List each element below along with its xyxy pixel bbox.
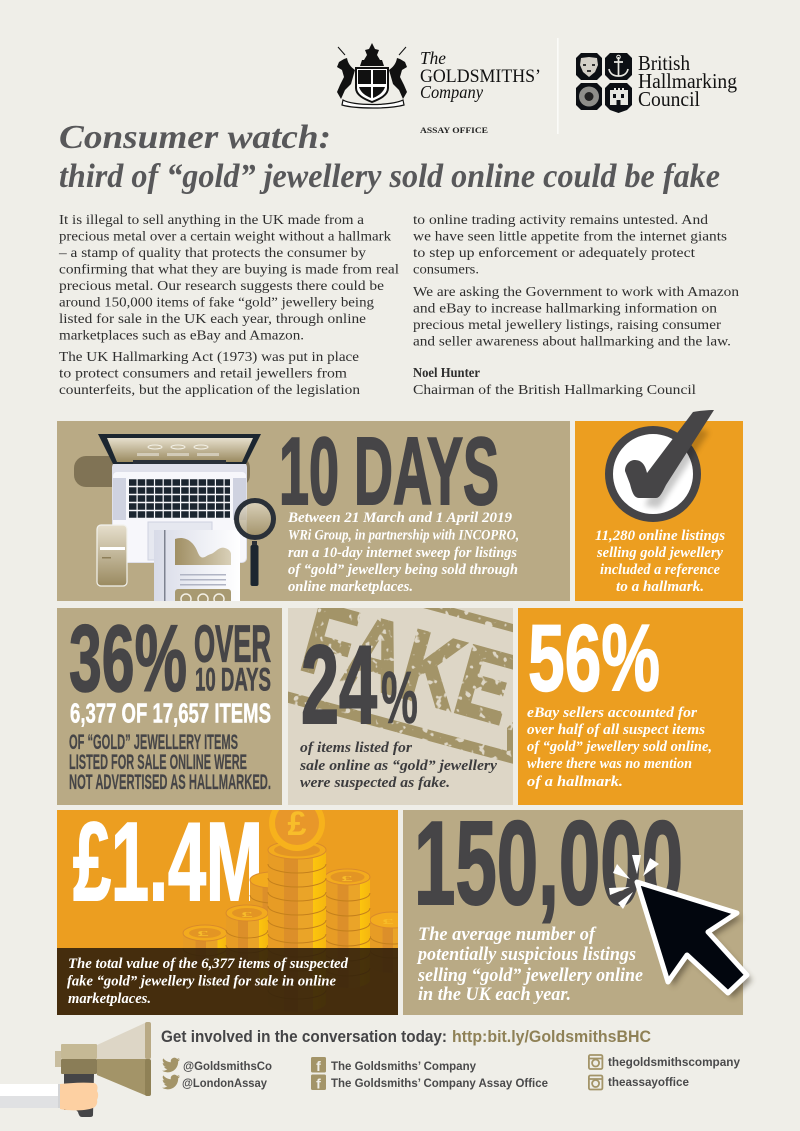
text: sweep description [287,510,519,595]
big number: 56%: 56% [528,606,660,712]
wordmark: Goldsmiths': GOLDSMITHS’ [420,66,541,87]
icon: laptop and documents illustration [74,434,274,609]
text block: intro left column: It is illegal to sell anything in the UK made from a [59,212,364,227]
panel: £1.4M [57,810,398,1015]
social: twitter [162,1058,272,1090]
text block: intro left column: precious metal. Our research suggests there could be [59,278,384,293]
icon: fake stamp [288,608,513,764]
icon: leopard tile [576,53,602,80]
icon: coat of arms crest [337,43,407,108]
text: total value: The total value of the 6,377 items of suspected [68,956,349,972]
text: listing description [595,528,725,595]
social: twitter: @LondonAssay [182,1076,267,1090]
title [59,119,720,195]
icon: castle tile [605,83,632,113]
text: ebay sellers: where there was no mention [527,756,692,772]
icon: gold coin stacks: £ [341,875,353,883]
wordmark: Assay Office: ASSAY OFFICE [420,126,488,135]
icon: fake stamp: FAKE [291,581,525,746]
text: average listings: potentially suspicious listings [416,945,636,965]
text: ebay sellers: of “gold” jewellery sold online, [527,739,712,755]
panel: 11,280 listings [575,410,743,601]
text: ebay sellers: of a hallmark. [527,774,623,790]
logo: The Goldsmiths' Company [337,43,541,135]
text: ebay sellers: eBay sellers accounted for [527,705,697,721]
text block: intro left column: listed for sale in the UK each year, through online [59,311,366,326]
wordmark: Company: Company [420,82,483,102]
big number: 36%: 36% [69,606,187,712]
text: sweep description: online marketplaces. [288,579,413,595]
text block: intro left column: counterfeits, but the application of the legislation [59,382,360,397]
text: ebay sellers: over half of all suspect items [527,722,705,738]
social: instagram [589,1055,740,1090]
text: call to action: Get involved in the conversation today: [161,1028,447,1046]
social: instagram: theassayoffice [608,1075,689,1089]
wordmark: Council: Council [638,87,700,111]
icon: gold coin stacks: £ [197,930,209,938]
icon: gold coin stacks [182,810,398,948]
text: average listings: in the UK each year. [418,985,571,1005]
big number: £1.4M: £1.4M [73,800,263,924]
text block: intro left column: marketplaces such as eBay and Amazon. [59,328,304,342]
text: total value: fake “gold” jewellery listed for sale in online [67,974,337,990]
big number: 24%: 24 [301,623,377,747]
panel: 24% fake [288,608,513,805]
wordmark: Hallmarking: Hallmarking [638,69,737,93]
text: sweep description: WRi Group, in partnership with INCOPRO, [288,528,519,544]
wordmark: The: The [420,48,446,68]
text: sweep description: Between 21 March and 1 April 2019 [287,510,512,526]
text: ebay sellers [527,705,712,790]
caption band [57,948,398,1015]
text block: intro left column: precious metal over a certain weight without a hallmark [59,228,391,244]
big number: 24%: % [381,656,418,739]
icon: rose tile [576,83,602,110]
text block: intro left column: The UK Hallmarking Act (1973) was put in place [59,349,359,365]
social: facebook: f [316,1058,321,1074]
social: instagram: thegoldsmithscompany [608,1055,740,1069]
social: facebook [311,1057,548,1092]
text block: intro right column: Chairman of the British Hallmarking Council [413,382,696,397]
text block: intro right column: We are asking the Government to work with Amazon [413,284,739,299]
icon: mouse cursor with click rays [609,855,752,998]
text: listing description: included a reference [600,562,721,578]
text: not advertised as hallmarked: LISTED FOR SALE ONLINE WERE [69,751,247,774]
text: listing description: to a hallmark. [616,579,704,595]
text block: intro right column: and seller awareness about hallmarking and the law. [413,334,731,348]
panel: 150,000 [403,797,752,1015]
text: listing description: selling gold jewellery [596,545,724,561]
text: sweep description: ran a 10-day internet sweep for listings [288,545,517,561]
panel: 10 days [57,418,570,609]
text block: intro right column: consumers. [413,262,479,276]
social: facebook: The Goldsmiths’ Company Assay Office [331,1076,548,1090]
text: total value [67,956,349,1007]
icon: gold coin stacks: £ [382,918,394,926]
text block: intro right column: precious metal jewellery listings, raising consumer [413,317,722,332]
text: suspected as fake: were suspected as fake. [300,775,450,791]
icon: gold coin stacks: £ [288,805,307,843]
label: over: OVER [194,616,271,674]
text: not advertised as hallmarked: OF “GOLD” JEWELLERY ITEMS [69,731,238,754]
social: facebook: f [316,1076,321,1092]
text block: intro right column: and eBay to increase hallmarking information on [413,300,717,316]
text block: intro right column: Noel Hunter [413,365,480,380]
icon: anchor tile [605,53,632,80]
icon: megaphone and hand [0,1022,151,1117]
text: average listings: selling “gold” jewellery online [417,966,643,986]
text block: intro left column: confirming that what they are buying is made from real [59,262,399,276]
text block: intro left column: around 150,000 items of fake “gold” jewellery being [59,294,374,310]
text: call to action [161,1028,651,1046]
title: Consumer watch: [59,119,331,156]
panel: 36% over 10 days [57,606,282,805]
wordmark: British: British [638,51,690,75]
logo: British Hallmarking Council [576,51,737,113]
text block: intro right column: to online trading activity remains untested. And [413,212,708,227]
text: total value: marketplaces. [68,991,151,1007]
social: facebook: The Goldsmiths’ Company [331,1059,476,1073]
text block: intro right column: to step up enforcement or adequately protect [413,245,695,260]
text: not advertised as hallmarked: NOT ADVERTISED AS HALLMARKED. [69,771,271,794]
text block: intro left column: to protect consumers and retail jewellers from [59,366,347,380]
icon: gold coin stacks: £ [241,911,253,919]
text: listing description: 11,280 online listings [595,528,725,544]
text block: intro left column: – a stamp of quality that protects the consumer by [58,245,366,260]
logo divider [557,38,559,134]
text: suspected as fake: sale online as “gold” jewellery [299,758,497,774]
panel: 56% ebay [518,606,743,805]
text block: intro right column: we have seen little appetite from the internet giants [413,228,727,244]
text: call to action: http:bit.ly/GoldsmithsBHC [452,1028,651,1046]
label: 10 days: 10 DAYS [195,662,271,698]
title: third of “gold” jewellery sold online could be fake [59,158,720,195]
big number: 10 days: 10 DAYS [279,418,499,525]
social: twitter: @GoldsmithsCo [183,1059,272,1073]
text block: intro left column [58,212,399,397]
text: average listings [416,925,643,1005]
text: sweep description: of “gold” jewellery being sold through [288,562,518,578]
text block: intro right column [413,212,739,397]
text: suspected as fake [299,740,497,791]
text: average listings: The average number of [418,925,597,945]
text: suspected as fake: of items listed for [300,740,412,756]
text: not advertised as hallmarked [69,731,271,794]
icon: check mark in circle [609,410,714,518]
label: 6,377 of 17,657 items: 6,377 OF 17,657 ITEMS [70,698,271,728]
